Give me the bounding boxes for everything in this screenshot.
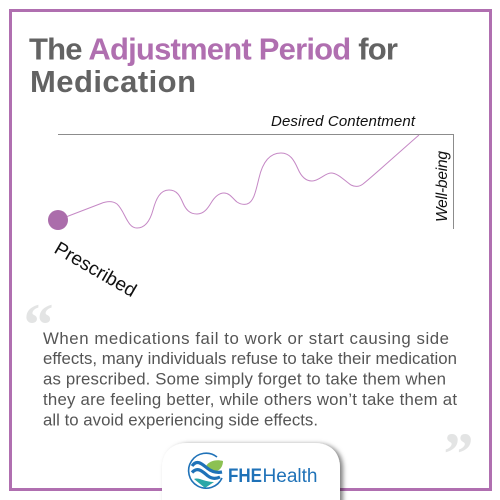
logo wordmark: Health [262, 466, 318, 487]
logo wordmark [228, 466, 318, 487]
icon: FHE Health heart [189, 453, 223, 488]
label: well-being: Well-being [434, 151, 451, 222]
logo tab [162, 443, 340, 500]
start dot [48, 210, 68, 230]
quote text: all to avoid experiencing side effects. [43, 410, 318, 430]
title: The Adjustment Period for [29, 32, 398, 66]
chart: adjustment period [48, 113, 454, 302]
quote text: they are feeling better, while others won’t take them at [43, 390, 457, 409]
quote text: When medications fail to work or start causing side [43, 329, 449, 348]
title [29, 32, 398, 99]
opening quote mark: “ [24, 292, 54, 358]
quote text: as prescribed. Some simply forget to take them when [43, 370, 446, 388]
quote text: effects, many individuals refuse to take their medication [43, 349, 457, 368]
label: prescribed: Prescribed [50, 238, 140, 302]
quote text [43, 329, 457, 430]
title: Medication [30, 64, 196, 99]
logo wordmark: FHE [228, 466, 262, 487]
white tab [162, 443, 340, 500]
axis lines [58, 134, 454, 229]
wellbeing curve [58, 135, 419, 228]
label: desired contentment: Desired Contentment [271, 113, 416, 130]
closing quote mark: ” [444, 421, 474, 487]
